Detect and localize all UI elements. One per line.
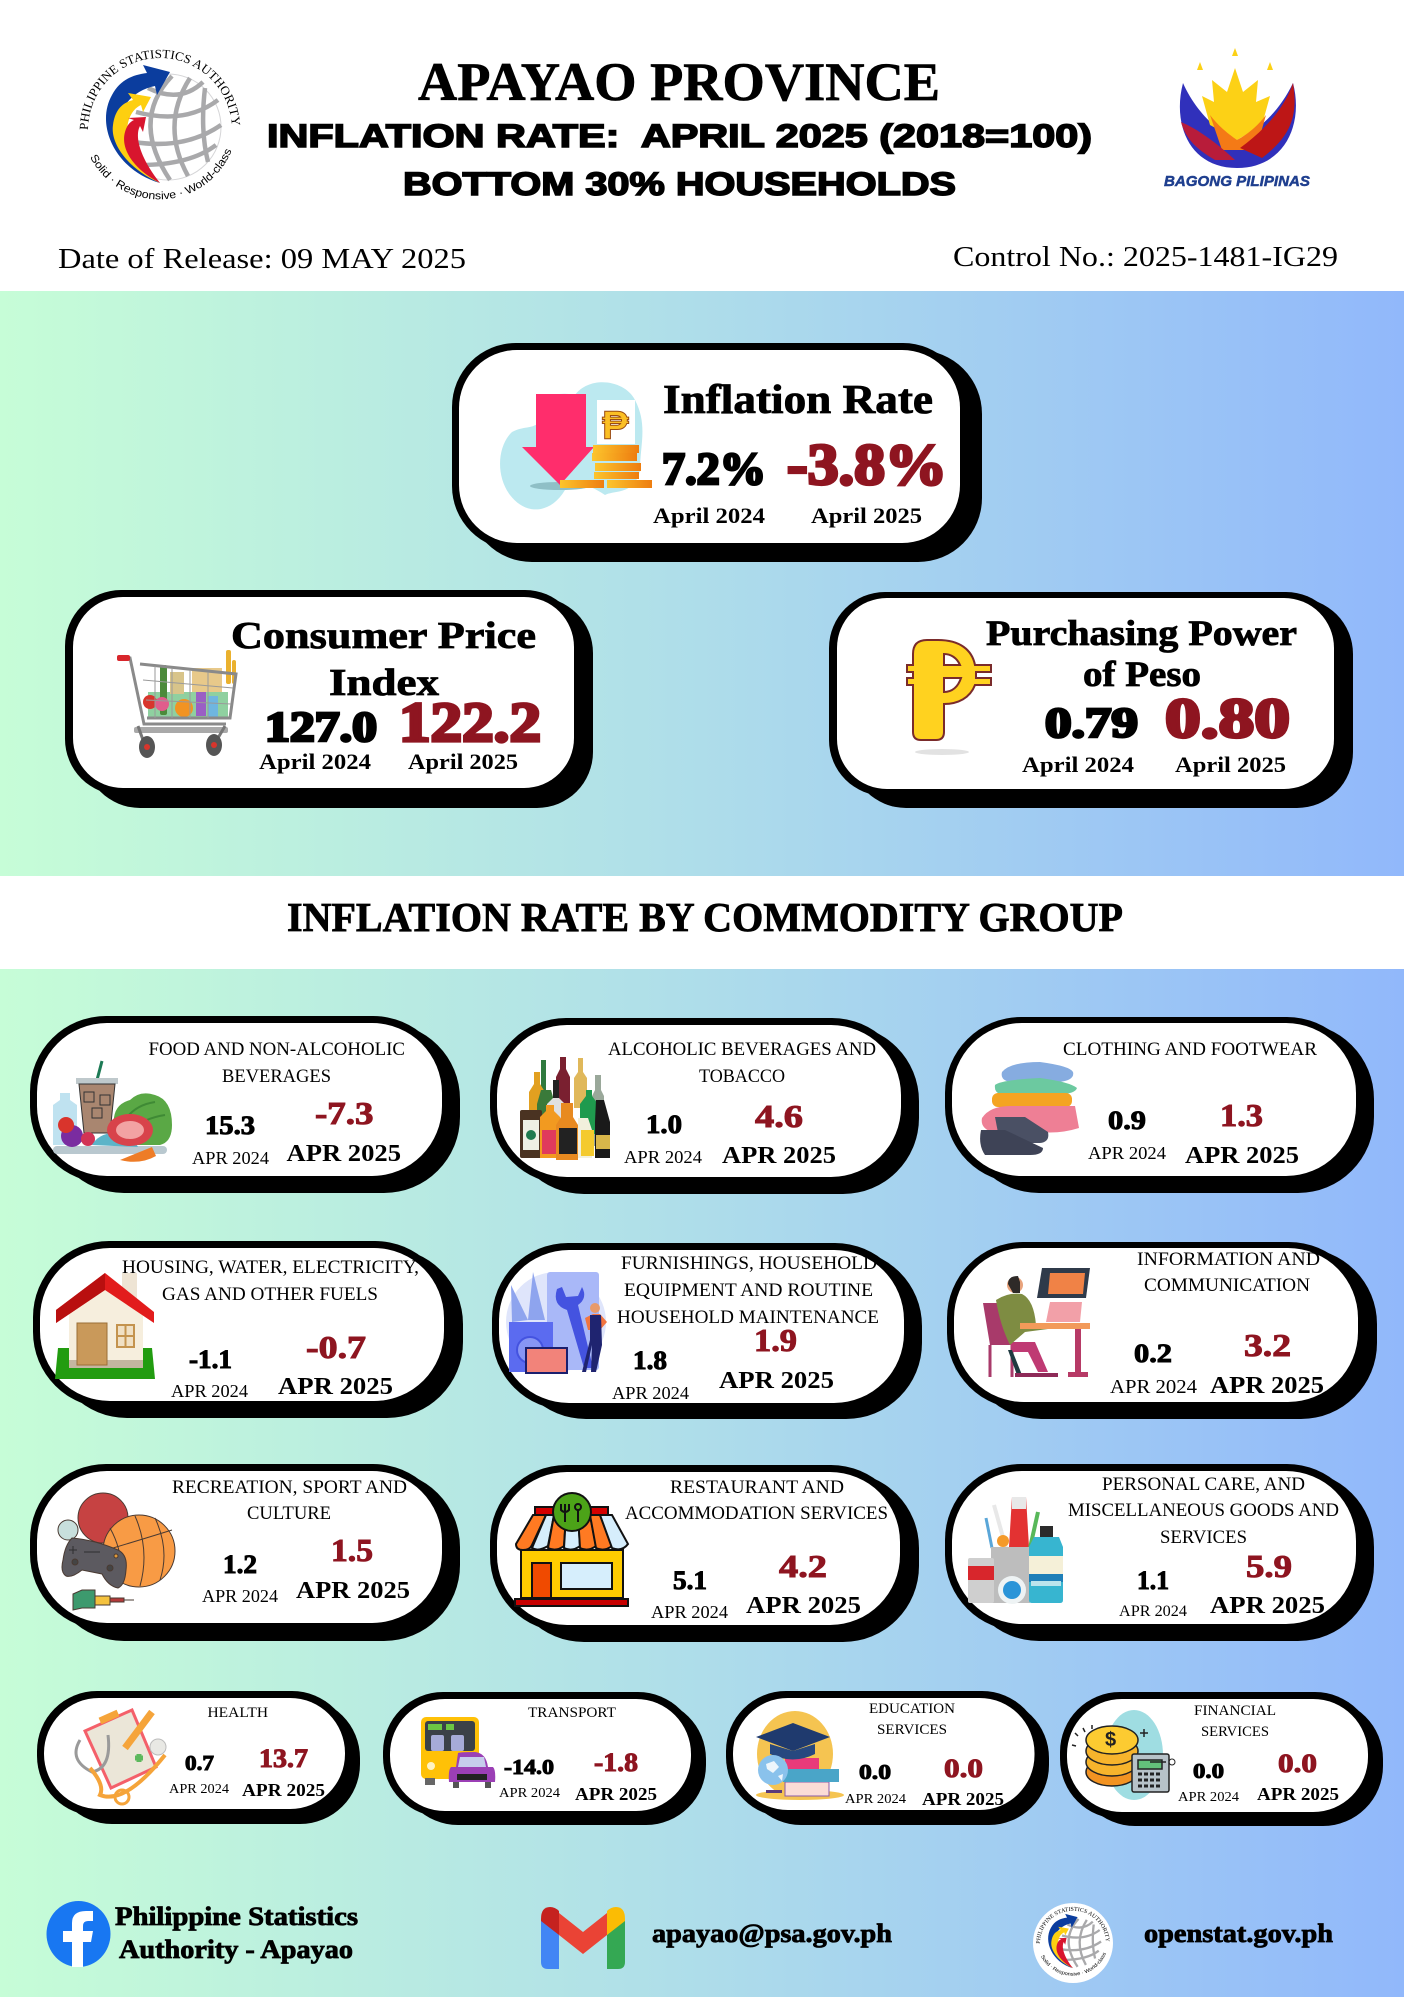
label: APR 2025: APR 2025: [1210, 1593, 1325, 1619]
icon: falling prices: [500, 382, 652, 509]
heading: [122, 1257, 419, 1305]
heading: MISCELLANEOUS GOODS AND: [1068, 1500, 1339, 1521]
panel: inflation rate: [452, 343, 982, 562]
heading: [608, 1039, 876, 1087]
label: APR 2024: APR 2024: [624, 1147, 702, 1167]
subtitle: inflation rate: INFLATION RATE: APRIL 2025 (2018=100): [267, 118, 1092, 154]
value: APR 2024: 1.2: [223, 1550, 257, 1579]
label: APR 2025: APR 2025: [296, 1578, 410, 1604]
label: APR 2024: APR 2024: [169, 1782, 229, 1797]
label: APR 2024: APR 2024: [192, 1148, 269, 1168]
title: APAYAO PROVINCE: [418, 52, 940, 112]
label: APR 2024: APR 2024: [1119, 1603, 1187, 1620]
panel: information and communication: [947, 1242, 1377, 1419]
icon: small PSA logo: Solid · Responsive · World-class: [1041, 1952, 1106, 1976]
panel: clothing and footwear: [945, 1017, 1374, 1193]
value: APR 2024: -14.0: [504, 1755, 554, 1779]
label: APR 2025: APR 2025: [1257, 1784, 1339, 1804]
heading: inflation rate: Inflation Rate: [663, 376, 933, 422]
label: APR 2024: APR 2024: [651, 1602, 728, 1622]
label: APR 2024: APR 2024: [612, 1383, 689, 1403]
date of release: Date of Release: 09 MAY 2025: [58, 243, 466, 275]
value: APR 2024: 0.0: [1193, 1759, 1224, 1783]
icon: house: [55, 1273, 155, 1379]
icon: peso sign: [907, 640, 991, 755]
panel: consumer price index: [65, 590, 593, 808]
panel: restaurant and accommodation services: [490, 1465, 919, 1642]
heading: [617, 1253, 879, 1328]
panel: transport: [383, 1692, 706, 1825]
heading: TRANSPORT: [528, 1705, 616, 1721]
panel: food and non-alcoholic beverages: [30, 1016, 460, 1193]
heading: HOUSING, WATER, ELECTRICITY,: [122, 1257, 419, 1278]
footer: facebook page name: Authority - Apayao: [119, 1935, 353, 1964]
background: upper gradient band: [0, 291, 1404, 876]
icon: graduation cap and books: [756, 1711, 844, 1800]
heading: [148, 1039, 405, 1087]
label: APR 2024: APR 2024: [1088, 1143, 1166, 1163]
value: April 2025: 0.80: [1165, 688, 1290, 750]
icon: toiletries: [968, 1497, 1063, 1604]
value: APR 2024: 0.2: [1134, 1339, 1172, 1368]
label: APR 2024: APR 2024: [1110, 1376, 1197, 1398]
value: APR 2025: 0.0: [944, 1754, 983, 1783]
value: APR 2025: 1.9: [754, 1322, 797, 1358]
value: APR 2024: 1.1: [1137, 1566, 1169, 1595]
label: APR 2024: APR 2024: [845, 1792, 906, 1807]
section heading: commodity group: INFLATION RATE BY COMMODITY GROUP: [287, 894, 1123, 940]
subtitle: bottom 30 percent households: BOTTOM 30% HOUSEHOLDS: [403, 166, 956, 202]
heading: RESTAURANT AND: [670, 1477, 844, 1498]
value: April 2025: 122.2: [399, 692, 541, 754]
label: APR 2024: APR 2024: [202, 1586, 278, 1606]
background: lower gradient band: [0, 969, 1404, 1997]
panel: recreation, sport and culture: [30, 1464, 460, 1641]
icon: bottles: [520, 1057, 610, 1160]
logo caption: Bagong Pilipinas: BAGONG PILIPINAS: [1164, 173, 1310, 190]
footer: facebook page name: Philippine Statistics: [115, 1902, 358, 1931]
label: APR 2024: APR 2024: [1178, 1790, 1239, 1805]
heading: [625, 1477, 888, 1524]
icon: bus and car: [421, 1717, 495, 1788]
label: APR 2025: APR 2025: [922, 1789, 1004, 1809]
heading: [1194, 1703, 1276, 1740]
value: April 2024: 7.2%: [662, 443, 766, 494]
label: APR 2025: APR 2025: [278, 1374, 393, 1400]
icon: small PSA logo: PHILIPPINE STATISTICS AUTHORITY: [1036, 1906, 1110, 1944]
heading: PERSONAL CARE, AND: [1102, 1474, 1305, 1495]
heading: SERVICES: [1160, 1527, 1247, 1548]
heading: TOBACCO: [699, 1066, 785, 1087]
logo: Bagong Pilipinas: [1180, 48, 1296, 168]
label: APR 2025: APR 2025: [242, 1780, 325, 1800]
icon: food and drinks: [53, 1061, 172, 1162]
value: APR 2024: 1.0: [646, 1110, 682, 1139]
heading: COMMUNICATION: [1144, 1275, 1310, 1296]
value: APR 2025: 13.7: [259, 1744, 308, 1773]
label: April 2025: April 2025: [408, 749, 518, 774]
panel: consumer price index: Index: [329, 662, 439, 704]
value: APR 2024: -1.1: [189, 1345, 232, 1374]
icon: coins and calculator: [1072, 1710, 1175, 1800]
panel: purchasing power of peso: of Peso: [1083, 654, 1201, 694]
panel: education services: [726, 1691, 1049, 1825]
heading: FURNISHINGS, HOUSEHOLD: [621, 1253, 877, 1274]
panel: personal care and miscellaneous: [945, 1464, 1374, 1641]
value: APR 2025: 3.2: [1244, 1327, 1291, 1363]
logo: Philippine Statistics Authority: [80, 50, 240, 200]
label: April 2024: April 2024: [1022, 752, 1134, 777]
value: APR 2024: 0.0: [859, 1760, 891, 1784]
heading: CULTURE: [247, 1503, 331, 1524]
heading: FOOD AND NON-ALCOHOLIC: [148, 1039, 405, 1060]
control number: Control No.: 2025-1481-IG29: [953, 241, 1338, 273]
value: APR 2025: -0.7: [306, 1329, 366, 1365]
heading: [172, 1477, 407, 1524]
icon: person at computer: [983, 1268, 1090, 1377]
icon: appliances and repairman: [506, 1272, 607, 1373]
value: APR 2024: 1.8: [633, 1346, 667, 1375]
panel: housing, water, electricity: [33, 1241, 463, 1418]
panel: alcoholic beverages and tobacco: [490, 1018, 919, 1194]
label: APR 2025: APR 2025: [719, 1368, 834, 1394]
icon: clipboard and stethoscope: [76, 1710, 166, 1804]
label: April 2024: April 2024: [259, 749, 371, 774]
icon: facebook: [46, 1901, 110, 1967]
heading: [1137, 1249, 1320, 1296]
panel: health: [37, 1691, 360, 1824]
label: APR 2025: APR 2025: [575, 1784, 657, 1804]
label: April 2025: April 2025: [811, 503, 922, 528]
footer: website: openstat.gov.ph: [1144, 1919, 1334, 1948]
heading: [869, 1701, 956, 1738]
value: APR 2025: 1.3: [1220, 1097, 1263, 1133]
heading: purchasing power of peso: Purchasing Power: [986, 613, 1297, 653]
value: APR 2025: 4.2: [779, 1548, 827, 1584]
value: APR 2025: 0.0: [1278, 1749, 1317, 1778]
icon: small PSA logo: [1033, 1903, 1113, 1983]
value: APR 2025: 4.6: [755, 1098, 803, 1134]
logo: Philippine Statistics Authority: Solid · Responsive · World-class: [91, 149, 231, 200]
heading: BEVERAGES: [222, 1066, 331, 1087]
logo: Philippine Statistics Authority: PHILIPPINE STATISTICS AUTHORITY: [80, 50, 240, 130]
label: APR 2025: APR 2025: [1185, 1143, 1299, 1169]
heading: ACCOMMODATION SERVICES: [625, 1503, 888, 1524]
heading: EQUIPMENT AND ROUTINE: [624, 1280, 873, 1301]
heading: EDUCATION: [869, 1701, 956, 1717]
label: APR 2024: APR 2024: [499, 1786, 560, 1801]
label: APR 2024: APR 2024: [171, 1381, 248, 1401]
heading: RECREATION, SPORT AND: [172, 1477, 407, 1498]
value: April 2025: -3.8%: [787, 432, 947, 497]
icon: coins and calculator: $: [1105, 1729, 1116, 1751]
icon: clothes and shoes: [980, 1062, 1079, 1155]
heading: ALCOHOLIC BEVERAGES AND: [608, 1039, 876, 1060]
heading: HEALTH: [208, 1705, 269, 1721]
heading: [1068, 1474, 1339, 1548]
icon: storefront: [515, 1493, 628, 1606]
panel: purchasing power of peso: [829, 592, 1353, 808]
icon: gmail: [541, 1907, 625, 1969]
label: April 2025: April 2025: [1175, 752, 1286, 777]
heading: CLOTHING AND FOOTWEAR: [1063, 1039, 1317, 1060]
panel: financial services: [1060, 1692, 1383, 1826]
label: APR 2025: APR 2025: [286, 1141, 401, 1167]
value: APR 2025: -1.8: [594, 1748, 638, 1777]
footer: facebook page name: [115, 1902, 358, 1964]
value: APR 2025: -7.3: [315, 1095, 374, 1131]
value: APR 2024: 15.3: [205, 1111, 255, 1140]
value: APR 2024: 0.9: [1108, 1106, 1146, 1135]
heading: GAS AND OTHER FUELS: [162, 1284, 378, 1305]
heading: SERVICES: [877, 1722, 947, 1738]
heading: HOUSEHOLD MAINTENANCE: [617, 1307, 879, 1328]
panel: furnishings and household equipment: [492, 1243, 922, 1419]
label: APR 2025: APR 2025: [722, 1143, 836, 1169]
heading: SERVICES: [1201, 1724, 1269, 1740]
heading: FINANCIAL: [1194, 1703, 1276, 1719]
value: APR 2025: 1.5: [331, 1532, 373, 1568]
icon: falling prices: ₱: [602, 404, 629, 448]
value: April 2024: 127.0: [265, 705, 377, 751]
footer: email: apayao@psa.gov.ph: [652, 1919, 893, 1948]
heading: consumer price index: Consumer Price: [231, 615, 536, 657]
icon: shopping cart: [117, 650, 236, 758]
value: APR 2024: 0.7: [185, 1751, 214, 1775]
value: April 2024: 0.79: [1045, 701, 1138, 747]
value: APR 2025: 5.9: [1246, 1548, 1292, 1584]
label: APR 2025: APR 2025: [1210, 1373, 1324, 1399]
heading: INFORMATION AND: [1137, 1249, 1320, 1270]
label: April 2024: April 2024: [653, 503, 765, 528]
label: APR 2025: APR 2025: [746, 1593, 861, 1619]
value: APR 2024: 5.1: [673, 1566, 707, 1595]
icon: sports equipment: [58, 1493, 175, 1610]
